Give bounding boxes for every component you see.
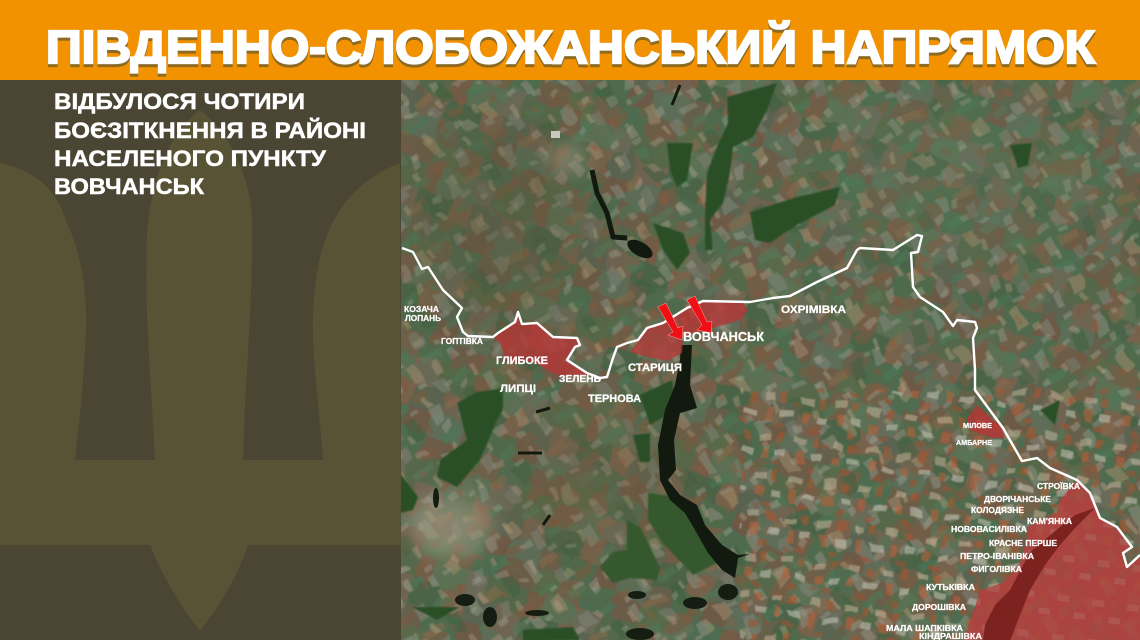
map labels: КУТЬКІВКА — [926, 582, 975, 592]
summary text: НАСЕЛЕНОГО ПУНКТУ — [54, 146, 327, 171]
map labels: ОХРІМІВКА — [781, 304, 846, 316]
zone: Vovchansk — [677, 301, 748, 340]
map labels: СТРОЇВКА — [1037, 482, 1080, 491]
satellite map — [380, 60, 1140, 641]
map labels: КОЗАЧА — [404, 305, 439, 314]
map labels: КАМ'ЯНКА — [1027, 516, 1072, 526]
border line — [402, 235, 1140, 567]
summary text: БОЄЗІТКНЕННЯ В РАЙОНІ — [54, 118, 366, 143]
map labels: ГЛИБОКЕ — [496, 355, 548, 367]
map labels: НОВОВАСИЛІВКА — [951, 524, 1027, 534]
map labels: КОЛОДЯЗНЕ — [971, 505, 1024, 515]
map labels: ФИГОЛІВКА — [971, 564, 1022, 574]
map labels: ДОРОШІВКА — [912, 602, 966, 612]
occupied zones — [493, 301, 1140, 641]
summary text: ВІДБУЛОСЯ ЧОТИРИ — [54, 89, 305, 114]
map labels: ГОПТІВКА — [441, 337, 483, 346]
zone: south-east — [955, 475, 1140, 641]
regional tint — [410, 100, 1110, 550]
city fields — [551, 131, 560, 138]
summary text — [54, 89, 366, 199]
map labels: КІНДРАШІВКА — [919, 631, 982, 641]
zone: Hlyboke — [494, 316, 591, 376]
summary text: ВОВЧАНСЬК — [54, 174, 204, 199]
map labels: ЛОПАНЬ — [405, 314, 441, 323]
zone: Starytsia — [630, 316, 683, 361]
title: ПІВДЕННО-СЛОБОЖАНСЬКИЙ НАПРЯМОК — [46, 21, 1096, 73]
header banner — [0, 0, 1140, 80]
map labels: ВОВЧАНСЬК — [683, 329, 764, 344]
map labels: КРАСНЕ ПЕРШЕ — [989, 538, 1057, 548]
sidebar panel — [0, 80, 401, 640]
trident emblem watermark — [0, 110, 401, 630]
urban areas — [408, 143, 586, 557]
title: ПІВДЕННО-СЛОБОЖАНСЬКИЙ НАПРЯМОК — [46, 24, 1096, 76]
map labels: ПЕТРО-ІВАНІВКА — [960, 551, 1034, 561]
map labels: ЛИПЦІ — [500, 383, 536, 395]
map labels: СТАРИЦЯ — [628, 362, 682, 374]
map labels: АМБАРНЕ — [956, 438, 992, 447]
map labels: ТЕРНОВА — [588, 393, 641, 405]
map labels: МІЛОВЕ — [963, 421, 992, 430]
map labels: ДВОРІЧАНСЬКЕ — [984, 494, 1051, 504]
arrow: north-west attack — [658, 303, 683, 340]
arrow: north attack — [687, 296, 712, 333]
map labels — [404, 304, 1080, 641]
forests — [400, 83, 1060, 641]
map labels: ЗЕЛЕНЬ — [559, 374, 601, 385]
zone: Milove — [967, 405, 1005, 438]
rivers and reservoirs — [518, 85, 750, 578]
map labels: МАЛА ШАПКІВКА — [886, 623, 963, 633]
